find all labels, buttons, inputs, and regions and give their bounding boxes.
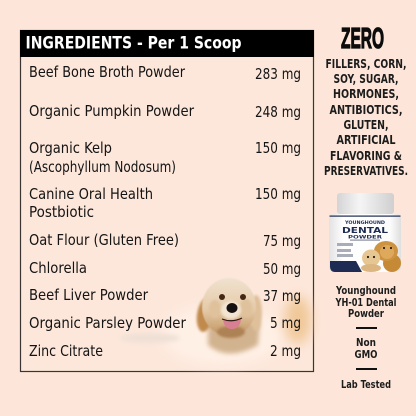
row: zinc citrate: Zinc Citrate (29, 342, 103, 360)
icon: product bottle: YOUNGHOUND (344, 220, 385, 226)
text block: zero list (324, 57, 408, 178)
row: organic parsley powder (29, 314, 301, 332)
text block: product name: YH-01 Dental (335, 296, 396, 309)
row: organic kelp: 150 mg (255, 139, 301, 157)
row: canine oral health postbiotic: Postbiotic (29, 203, 94, 221)
row: beef liver powder (29, 286, 301, 305)
row: beef bone broth powder (29, 63, 301, 83)
row: chlorella: 50 mg (263, 260, 301, 278)
text block: zero list: HORMONES, (333, 87, 399, 101)
row: chlorella (29, 259, 301, 278)
text block: lab tested: Lab Tested (341, 378, 391, 391)
row: oat flour: 75 mg (263, 232, 301, 250)
panel: ingredients table (20, 30, 314, 372)
row: organic kelp: (Ascophyllum Nodosum) (29, 158, 176, 176)
row: organic kelp (29, 139, 301, 176)
text block: product name (335, 284, 396, 320)
table frame (20, 30, 314, 372)
illustration: fluffy dog photo (120, 278, 311, 365)
row: organic kelp: Organic Kelp (29, 139, 112, 157)
row: chlorella: Chlorella (29, 259, 87, 277)
heading: INGREDIENTS - Per 1 Scoop (26, 34, 242, 54)
row: beef liver powder: Beef Liver Powder (29, 286, 149, 304)
icon: product bottle: DENTAL (342, 226, 388, 235)
row: oat flour (29, 231, 301, 250)
row: zinc citrate (29, 342, 301, 360)
header bar (20, 30, 314, 57)
row: organic pumpkin powder: 248 mg (255, 103, 301, 121)
row: oat flour: Oat Flour (Gluten Free) (29, 231, 179, 249)
icon: product bottle: POWDER (348, 234, 383, 240)
text block: zero list: GLUTEN, (344, 118, 388, 132)
text block: non GMO: GMO (354, 348, 378, 361)
row: organic parsley powder: Organic Parsley Powder (29, 314, 187, 332)
row: canine oral health postbiotic: Canine Oral Health (29, 185, 153, 203)
row: beef liver powder: 37 mg (263, 287, 301, 305)
row: beef bone broth powder: Beef Bone Broth Powder (29, 63, 186, 81)
icon: product bottle (329, 193, 401, 272)
text block: non GMO (354, 336, 378, 361)
row: organic pumpkin powder: Organic Pumpkin Powder (29, 102, 195, 120)
text block: zero list: ARTIFICIAL (336, 133, 396, 147)
row: organic pumpkin powder (29, 102, 301, 121)
row: beef bone broth powder: 283 mg (255, 65, 301, 83)
text block: product name: Younghound (335, 284, 396, 297)
row: zinc citrate: 2 mg (270, 342, 301, 360)
text block: non GMO: Non (356, 336, 376, 349)
row: canine oral health postbiotic: 150 mg (255, 185, 301, 203)
row: canine oral health postbiotic (29, 185, 301, 221)
text block: product name: Powder (348, 307, 384, 320)
row: organic parsley powder: 5 mg (270, 314, 301, 332)
